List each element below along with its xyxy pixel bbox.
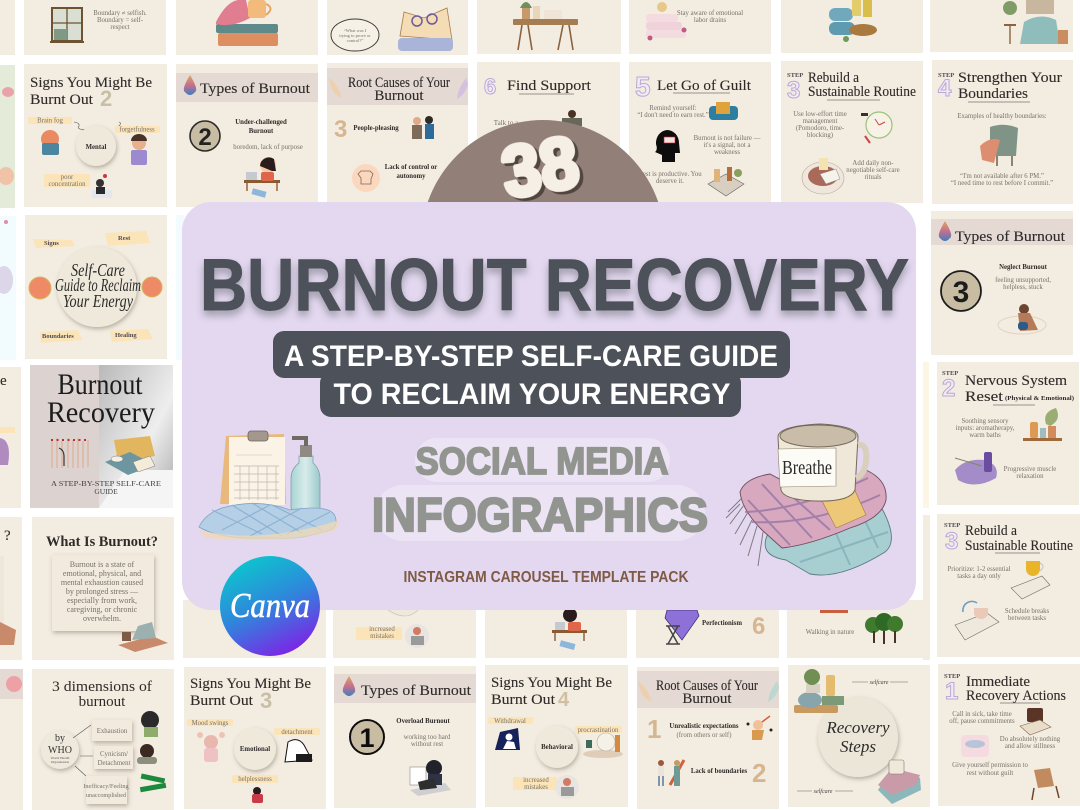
tile: types of burnout 2: Types of Burnout (200, 81, 311, 97)
tile: types of burnout 2 (176, 64, 318, 207)
tile: rebuild a sustainable routine (right column): STEP (944, 522, 960, 529)
partial tiles at the left edge: e (0, 373, 7, 389)
tile: immediate recovery actions: 1 (945, 678, 958, 705)
tile: nervous system reset: relaxation (1016, 473, 1044, 480)
tile: strengthen your boundaries: STEP (938, 72, 954, 79)
tile: immediate recovery actions: Recovery Actions (966, 688, 1066, 704)
tile: rebuild a sustainable routine (step 3): Add daily non- (852, 160, 894, 167)
tile: signs you might be burnt out 4: 4 (558, 689, 570, 711)
top row tile: boundary: respect (110, 24, 130, 31)
tile: signs you might be burnt out 2: poor (61, 174, 74, 181)
tile: what is burnout: mental exhaustion caused (61, 578, 143, 587)
top row tile: cloud and open book: control?” (347, 38, 363, 43)
lower row tile: increased mistakes (333, 600, 476, 658)
canva logo: Canva (230, 586, 310, 625)
tile: strengthen your boundaries: Boundaries (958, 86, 1028, 102)
tile: signs you might be burnt out 3: detachment (281, 729, 313, 736)
tile: nervous system reset: STEP (942, 370, 958, 377)
tile: root causes 1 and 2: Unrealistic expectations (669, 723, 739, 730)
lower row tile: increased mistakes: increased (369, 626, 395, 633)
tile: signs you might be burnt out 3: Mood swings (192, 720, 229, 727)
lower row tile: increased mistakes: mistakes (370, 633, 394, 640)
tile: signs you might be burnt out 4: mistakes (524, 784, 548, 791)
tile: types of burnout 1: Types of Burnout (361, 683, 472, 699)
tile: burnout recovery cover: GUIDE (94, 487, 118, 496)
top row tile: boundary: Boundary = self- (97, 17, 144, 24)
tile: types of burnout 1 (334, 666, 476, 808)
tile: signs you might be burnt out 3: Signs You Might Be (190, 676, 311, 692)
heading: social media: SOCIAL MEDIA (416, 441, 668, 483)
tile: 3 dimensions of burnout: Inefficacy/Feeling (83, 783, 129, 790)
tile: types of burnout 3: Types of Burnout (955, 229, 1066, 245)
tile: types of burnout 1: working too hard (404, 734, 451, 741)
tile: signs you might be burnt out 2: concentration (48, 181, 86, 188)
tile: types of burnout 2: 2 (198, 124, 212, 151)
heading: infographics: INFOGRAPHICS (372, 488, 708, 541)
subtitle line 2: TO RECLAIM YOUR ENERGY (334, 378, 730, 411)
tile: let go of guilt: deserve it. (656, 178, 684, 185)
top row tile: boundary: Boundary ≠ selfish. (93, 10, 147, 17)
tile: signs you might be burnt out 4: increased (523, 777, 549, 784)
canva logo (220, 556, 320, 656)
top row tile: emotional labor: labor drains (694, 17, 726, 24)
tile: signs you might be burnt out 3: Emotional (240, 746, 270, 753)
tile: rebuild a sustainable routine (step 3) (781, 61, 923, 203)
tile: rebuild a sustainable routine (right column) (937, 514, 1080, 657)
main lilac panel (182, 202, 916, 610)
tile: rebuild a sustainable routine (step 3): Sustainable Routine (808, 84, 916, 100)
tile: what is burnout: especially from work, (67, 596, 137, 605)
tile: signs you might be burnt out 3: Burnt Out (190, 693, 254, 709)
title: Burnout Recovery: BURNOUT RECOVERY (200, 245, 909, 326)
tile: rebuild a sustainable routine (right column): 3 (945, 528, 958, 555)
tile: root causes 1 and 2: 1 (647, 714, 661, 744)
mug label: Breathe (782, 457, 832, 479)
tile: 3 dimensions of burnout (32, 669, 174, 810)
tile: let go of guilt: “I don't need to earn rest.” (637, 112, 709, 119)
tile: burnout recovery cover: A STEP-BY-STEP SELF-CARE (51, 479, 161, 488)
lower row tile: perfectionism: 6 (752, 613, 765, 640)
tile: rebuild a sustainable routine (right column): tasks a day only (957, 573, 1001, 580)
tile: root causes 1 and 2: Root Causes of Your (656, 678, 758, 694)
tile: nervous system reset: warm baths (969, 432, 1001, 439)
tile: types of burnout 2: Burnout (249, 128, 274, 135)
tile: what is burnout: overwhelm. (83, 614, 121, 623)
tile: what is burnout (32, 517, 174, 660)
caption: instagram carousel template pack: INSTAGRAM CAROUSEL TEMPLATE PACK (404, 569, 689, 586)
tile: strengthen your boundaries: “I'm not available after 6 PM.” (960, 173, 1044, 180)
tile: recovery steps: selfcare (814, 788, 833, 795)
tile: signs you might be burnt out 2: Brain fog (37, 118, 64, 124)
lower row tile: walking in nature: Walking in nature (806, 629, 854, 636)
tile: types of burnout 2: Under-challenged (235, 119, 287, 126)
tile: what is burnout: by prolonged stress — (66, 587, 139, 596)
tile: let go of guilt: 5 (635, 71, 651, 102)
tile: let go of guilt: Remind yourself: (649, 105, 697, 112)
tile: signs you might be burnt out 2: Mental (86, 144, 106, 151)
tile: self-care guide cover: Healing (115, 332, 137, 339)
partial tiles between the columns (176, 215, 930, 660)
tile: signs you might be burnt out 2: forgetfulness (119, 126, 155, 134)
tile: signs you might be burnt out 4: procrastination (578, 727, 619, 734)
tile: rebuild a sustainable routine (step 3): (Pomodoro, time- (796, 125, 845, 132)
tile: immediate recovery actions: Call in sick, take time (952, 711, 1012, 718)
tile: rebuild a sustainable routine (step 3): Use low-effort time (793, 111, 847, 118)
tile: rebuild a sustainable routine (right column): Rebuild a (965, 523, 1017, 539)
tile: immediate recovery actions: and allow stillness (1005, 743, 1055, 750)
tile: types of burnout 3: helpless, stuck (1003, 284, 1043, 291)
tile: 3 dimensions of burnout: burnout (79, 694, 126, 710)
tile: types of burnout 3: feeling unsupported, (995, 277, 1051, 284)
tile: signs you might be burnt out 4: Withdrawal (494, 718, 526, 725)
tile: 3 dimensions of burnout: Organization (51, 760, 69, 764)
top row tile: cloud and open book: “What was I (344, 28, 367, 33)
partial tiles at the left edge (0, 0, 23, 810)
tile: nervous system reset: Nervous System (965, 373, 1067, 389)
tile: 3 dimensions of burnout: WHO (48, 745, 72, 756)
tile: nervous system reset: Progressive muscle (1004, 466, 1056, 473)
tile: types of burnout 3: Neglect Burnout (999, 264, 1048, 271)
tile: let go of guilt (629, 62, 771, 203)
tile: signs you might be burnt out 2 (24, 64, 167, 207)
tile: strengthen your boundaries: Examples of healthy boundaries: (957, 113, 1047, 120)
tile: 3 dimensions of burnout: unaccomplished (86, 792, 127, 799)
tile: nervous system reset: Soothing sensory (961, 418, 1009, 425)
lower row tile: perfectionism (636, 600, 779, 658)
tile: root causes 3: Lack of control or (385, 164, 437, 171)
tile: signs you might be burnt out 3: helplessness (238, 776, 272, 783)
tile: root causes 3: 3 (334, 116, 347, 143)
tile: root causes 1 and 2: (from others or self) (677, 732, 731, 739)
tile: types of burnout 3: 3 (953, 276, 969, 309)
tile: rebuild a sustainable routine (right column): between tasks (1008, 615, 1046, 622)
tile: signs you might be burnt out 4: Burnt Out (491, 692, 556, 708)
lower row tile under the panel: canva backing (183, 600, 326, 658)
tile: burnout recovery cover: Recovery (47, 396, 155, 429)
subtitle pills (273, 331, 790, 417)
tile: find support: 6 (484, 74, 496, 99)
tile: signs you might be burnt out 4: Behavioral (541, 744, 573, 751)
top row tile: cloud and open book: trying to prove or (339, 33, 371, 38)
tile: 3 dimensions of burnout: by (55, 733, 65, 744)
tile: self-care guide cover: Rest (118, 235, 131, 242)
top row tile: reading corner (930, 0, 1073, 52)
top row tile: boundary (24, 0, 166, 55)
tile: self-care guide cover (25, 215, 167, 359)
tile: self-care guide cover: Boundaries (42, 333, 74, 340)
tile: signs you might be burnt out 3: 3 (260, 688, 272, 713)
tile: root causes 1 and 2: 2 (752, 758, 766, 788)
icon: breathe mug on stacked blankets (726, 424, 891, 575)
tile: immediate recovery actions: STEP (944, 673, 960, 680)
tile: 3 dimensions of burnout: Detachment (98, 760, 131, 767)
tile: let go of guilt: weakness (714, 149, 740, 156)
badge number: 38: 38 (497, 123, 584, 213)
tile: rebuild a sustainable routine (right column): Prioritize: 1-2 essential (947, 566, 1011, 573)
tile: signs you might be burnt out 4 (485, 665, 628, 807)
tile: root causes 3: People-pleasing (353, 125, 399, 132)
tile: rebuild a sustainable routine (step 3): management (803, 118, 837, 125)
tile: rebuild a sustainable routine (step 3): rituals (864, 174, 882, 181)
tile: immediate recovery actions: Immediate (966, 674, 1030, 690)
tile: find support: Find Support (507, 78, 592, 94)
tile: strengthen your boundaries: Strengthen Your (958, 70, 1062, 86)
lower row tile: child at desk (485, 600, 627, 658)
lower row tile: walking in nature (787, 600, 930, 658)
tile: types of burnout 3 (931, 211, 1073, 355)
subtitle line 1: A STEP-BY-STEP SELF-CARE GUIDE (284, 340, 778, 373)
tile: root causes 3 (327, 63, 468, 205)
tile: root causes 1 and 2: Burnout (682, 691, 732, 707)
top row tile: wooden table (477, 0, 621, 54)
tile: immediate recovery actions: Do absolutely nothing (1000, 736, 1061, 743)
lower row tile: perfectionism: Perfectionism (702, 620, 742, 627)
tile: types of burnout 2: boredom, lack of purpose (233, 144, 303, 151)
tile: recovery steps: selfcare (870, 679, 889, 686)
tile: find support (477, 62, 620, 203)
tile: what is burnout: Burnout is a state of (70, 560, 135, 569)
tile: signs you might be burnt out 2: Signs You Might Be (30, 75, 152, 91)
tile: nervous system reset (937, 362, 1079, 505)
tile: 3 dimensions of burnout: Cynicism/ (100, 751, 128, 758)
tile: immediate recovery actions: off, pause commitments (949, 718, 1015, 725)
badge: taupe circle behind panel (421, 120, 665, 364)
tile: 3 dimensions of burnout: World Health (51, 756, 70, 760)
tile: what is burnout: What Is Burnout? (46, 534, 158, 550)
tile: nervous system reset: inputs: aromatherapy, (956, 425, 1015, 432)
tile: burnout recovery cover: Burnout (58, 368, 143, 401)
tile: self-care guide cover: Signs (44, 240, 59, 247)
tile: recovery steps: Recovery (825, 718, 890, 737)
tile: rebuild a sustainable routine (step 3): negotiable self-care (846, 167, 900, 174)
top row tile: towels and oil (781, 0, 923, 53)
tile: find support: Talk to a (494, 119, 519, 127)
tile: signs you might be burnt out 3 (184, 667, 326, 809)
tile: let go of guilt: it's a signal, not a (703, 142, 751, 149)
partial tiles at the left edge: ? (4, 528, 11, 544)
tile: types of burnout 1: without rest (411, 741, 443, 748)
tile: 3 dimensions of burnout: Exhaustion (97, 728, 128, 735)
tile: signs you might be burnt out 2: Burnt Out (30, 92, 94, 108)
top row tile: cloud and open book (327, 0, 468, 55)
tile: recovery steps (788, 665, 930, 807)
tile: what is burnout: emotional, physical, and (63, 569, 141, 578)
tile: self-care guide cover: Guide to Reclaim (55, 275, 141, 295)
top row tile: emotional labor: Stay aware of emotional (677, 10, 743, 17)
tile: immediate recovery actions: Give yourself permission to (952, 762, 1028, 769)
tile: 3 dimensions of burnout: 3 dimensions of (52, 679, 152, 695)
tile: nervous system reset: Reset (965, 389, 1004, 405)
tile: rebuild a sustainable routine (right column): Schedule breaks (1005, 608, 1050, 615)
tile: nervous system reset: (Physical & Emotional) (1005, 395, 1074, 402)
tile: root causes 3: Root Causes of Your (348, 75, 450, 91)
tile: immediate recovery actions: rest without guilt (967, 770, 1013, 777)
tile: strengthen your boundaries (932, 60, 1073, 204)
tile: rebuild a sustainable routine (step 3): 3 (787, 77, 800, 104)
tile: signs you might be burnt out 2: 2 (100, 86, 112, 111)
icon: calendar, soap bottle and towel (199, 431, 340, 540)
tile: let go of guilt: Burnout is not failure — (694, 135, 761, 142)
top row tile: slippers on books (176, 0, 318, 55)
tile: immediate recovery actions (938, 664, 1080, 806)
tile: rebuild a sustainable routine (step 3): Rebuild a (808, 70, 859, 86)
tile: let go of guilt: Let Go of Guilt (657, 78, 752, 94)
top row tile: emotional labor (629, 0, 771, 54)
tile: types of burnout 1: Overload Burnout (396, 718, 450, 725)
tile: self-care guide cover: Your Energy (63, 291, 133, 311)
tile: recovery steps: Steps (840, 737, 876, 756)
tile: strengthen your boundaries: “I need time to rest before I commit.” (951, 180, 1053, 187)
tile: root causes 1 and 2: Lack of boundaries (691, 768, 747, 775)
tile: strengthen your boundaries: 4 (938, 75, 952, 102)
tile: what is burnout: caregiving, or chronic (67, 605, 138, 614)
tile: root causes 1 and 2 (637, 667, 779, 809)
tile: rebuild a sustainable routine (step 3): blocking) (807, 132, 833, 139)
tile: root causes 3: autonomy (396, 173, 426, 180)
tile: root causes 3: Burnout (374, 88, 424, 104)
tile: signs you might be burnt out 4: Signs You Might Be (491, 675, 612, 691)
tile: nervous system reset: 2 (942, 375, 955, 402)
tile: rebuild a sustainable routine (step 3): STEP (787, 72, 803, 79)
tile: types of burnout 1: 1 (359, 723, 375, 753)
tile: self-care guide cover: Self-Care (71, 260, 125, 280)
tile: burnout recovery cover (30, 365, 173, 508)
tile: let go of guilt: Rest is productive. You (638, 171, 702, 178)
